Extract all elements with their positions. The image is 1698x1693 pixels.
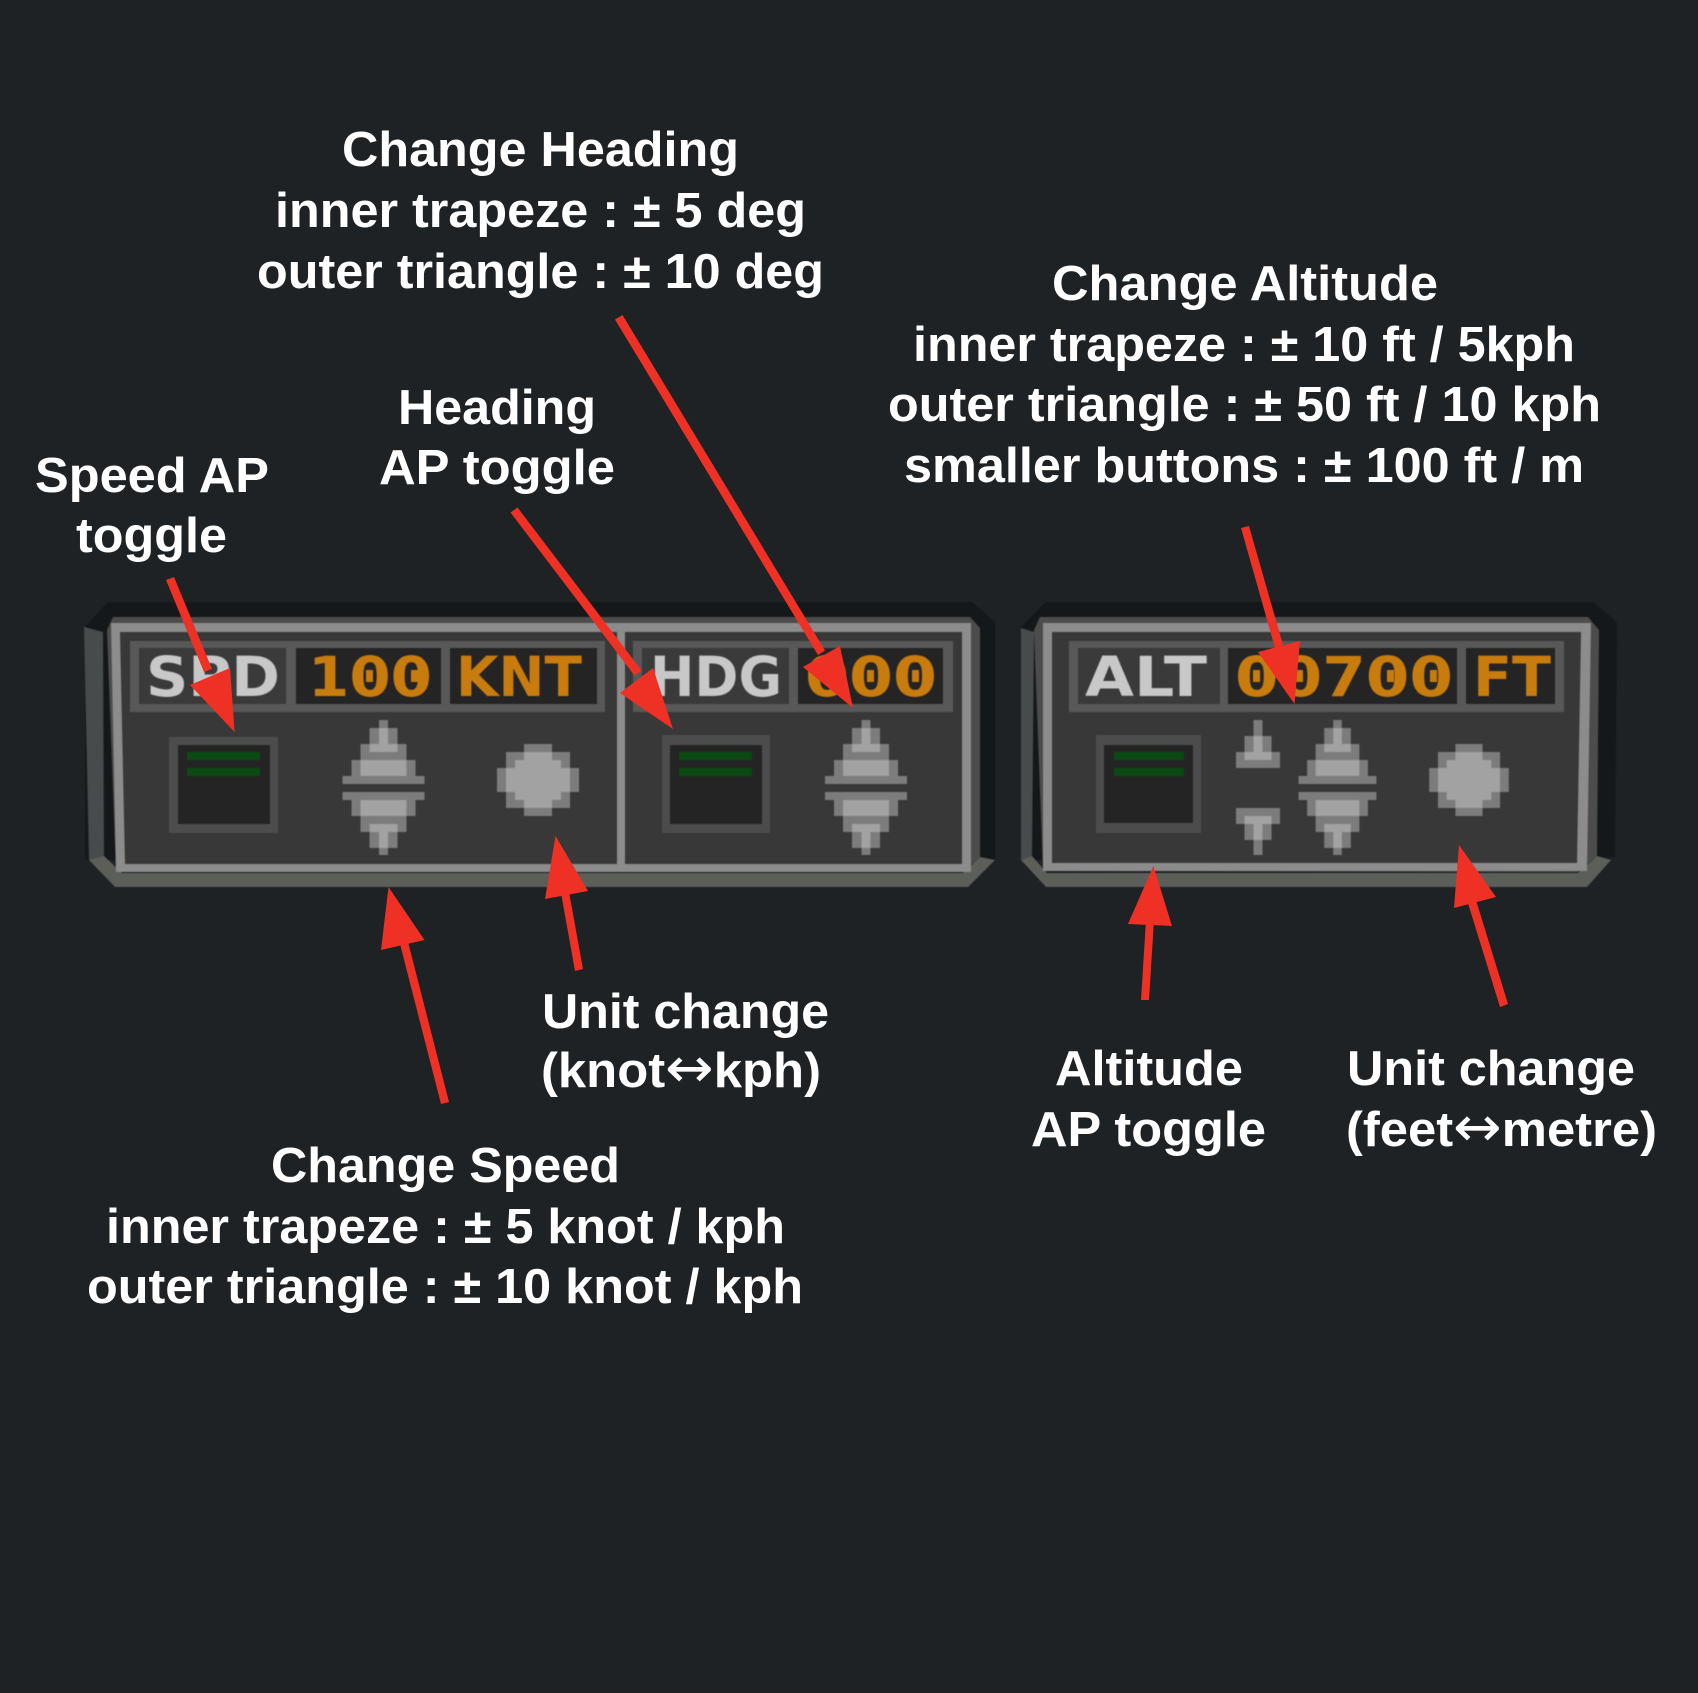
- arrow: unit change speed: [545, 836, 588, 971]
- label: unit change knot to kph: [541, 985, 829, 1101]
- panel shadow: [85, 602, 995, 860]
- panel rim: [107, 617, 980, 872]
- arrow: change heading: [615, 315, 853, 708]
- altitude AP toggle: [1096, 735, 1201, 833]
- heading display: HDG: [650, 645, 782, 709]
- label: change altitude: smaller buttons : ± 100 ft / m: [904, 439, 1584, 493]
- arrow: speed AP toggle: [166, 577, 235, 732]
- altitude panel bottom bevel: [1021, 856, 1611, 887]
- label: change heading: outer triangle : ± 10 deg: [257, 245, 824, 299]
- panel face: [120, 632, 962, 864]
- speed display: KNT: [456, 645, 582, 709]
- panel: speed and heading autopilot: [84, 602, 995, 887]
- speed change buttons: [342, 720, 424, 855]
- arrow: altitude AP toggle: [1128, 866, 1172, 1000]
- speed display: 100: [308, 645, 432, 709]
- panel bottom bevel: [89, 856, 995, 887]
- speed unit button: [497, 744, 579, 816]
- arrow: change speed: [381, 887, 449, 1104]
- label: speed AP toggle: toggle: [76, 509, 227, 563]
- altitude panel frame: [1043, 623, 1591, 871]
- label: heading AP toggle: Heading: [398, 381, 596, 435]
- altitude display: FT: [1473, 645, 1551, 709]
- label: unit change feet to metre: [1346, 1042, 1657, 1160]
- altitude panel shadow: [1021, 602, 1617, 860]
- label: heading AP toggle: [379, 381, 615, 495]
- speed AP toggle: [169, 737, 278, 833]
- panel left bevel: [84, 627, 104, 860]
- panel: altitude autopilot: [1021, 602, 1617, 887]
- heading AP toggle: [662, 735, 770, 833]
- heading display: [633, 641, 953, 712]
- label: speed AP toggle: [35, 449, 269, 563]
- label: change heading: inner trapeze : ± 5 deg: [275, 184, 806, 238]
- altitude panel face: [1052, 632, 1581, 863]
- label: change altitude: [888, 257, 1601, 493]
- label: speed AP toggle: Speed AP: [35, 449, 269, 503]
- label: altitude AP toggle: Altitude: [1055, 1042, 1243, 1096]
- label: altitude AP toggle: [1031, 1042, 1266, 1157]
- altitude display: ALT: [1085, 645, 1208, 709]
- altitude smaller buttons: [1236, 720, 1280, 855]
- label: change heading: [257, 123, 824, 299]
- label: unit change knot to kph: (knot↔kph): [541, 1036, 821, 1101]
- divider between speed and heading: [617, 623, 625, 864]
- speed display: [130, 641, 605, 712]
- speed display: SPD: [146, 645, 280, 709]
- altitude display: [1069, 641, 1564, 712]
- panel frame: [111, 623, 971, 872]
- altitude unit button: [1429, 744, 1509, 816]
- label: change altitude: inner trapeze : ± 10 ft / 5kph: [913, 318, 1575, 372]
- arrow: heading AP toggle: [510, 508, 673, 729]
- label: heading AP toggle: AP toggle: [379, 441, 615, 495]
- altitude panel rim: [1034, 617, 1599, 872]
- label: change speed: inner trapeze : ± 5 knot / kph: [106, 1200, 785, 1254]
- label: change speed: outer triangle : ± 10 knot / kph: [87, 1260, 803, 1314]
- heading display: 000: [805, 645, 937, 709]
- label: unit change feet to metre: (feet↔metre): [1346, 1095, 1657, 1160]
- label: change altitude: Change Altitude: [1052, 257, 1438, 311]
- heading change buttons: [825, 720, 907, 855]
- label: change speed: Change Speed: [271, 1139, 620, 1193]
- arrow: unit change altitude: [1454, 845, 1508, 1007]
- altitude change buttons: [1299, 720, 1376, 855]
- label: unit change feet to metre: Unit change: [1347, 1042, 1635, 1096]
- label: change heading: Change Heading: [342, 123, 739, 177]
- altitude display: 00700: [1235, 645, 1453, 709]
- label: change altitude: outer triangle : ± 50 ft / 10 kph: [888, 378, 1601, 432]
- label: change speed: [87, 1139, 803, 1314]
- arrow: change altitude: [1241, 526, 1300, 704]
- altitude panel left bevel: [1021, 628, 1034, 860]
- label: altitude AP toggle: AP toggle: [1031, 1103, 1266, 1157]
- label: unit change knot to kph: Unit change: [542, 985, 829, 1039]
